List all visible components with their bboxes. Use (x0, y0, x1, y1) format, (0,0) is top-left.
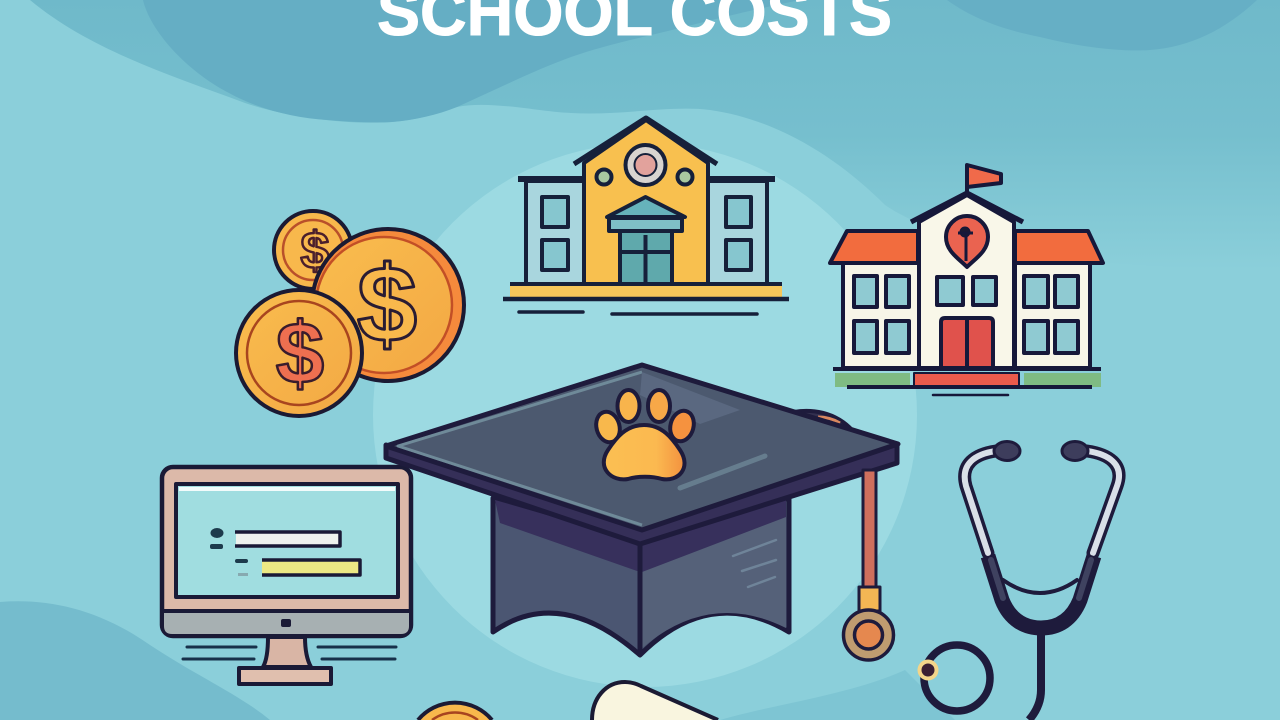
inner arc (1003, 580, 1077, 593)
flag (967, 165, 1001, 192)
icon: yellow school building (503, 118, 789, 314)
screen content rows (210, 528, 360, 576)
small back coin: $ (301, 222, 330, 280)
camera (281, 619, 291, 627)
tassel button (794, 411, 853, 431)
left tube (965, 451, 996, 553)
screen (176, 484, 398, 597)
badge (946, 216, 988, 267)
left earpiece (994, 442, 1020, 460)
yoke (988, 556, 1094, 628)
tubing ring (924, 645, 990, 711)
right roof (1015, 231, 1103, 263)
wing cornices (518, 176, 775, 182)
icon: graduation cap with paw (386, 365, 898, 660)
screen highlight (179, 487, 395, 491)
icon: computer monitor (162, 467, 411, 684)
cap body (493, 498, 789, 655)
small back coin (274, 211, 352, 289)
door (941, 318, 993, 368)
yoke highlight (991, 560, 1091, 598)
tube stem (1029, 635, 1041, 720)
icon: coins (236, 211, 464, 416)
icon: red roof school building (830, 165, 1103, 395)
icon: bottom coin (418, 703, 492, 720)
icon: stethoscope (920, 442, 1119, 720)
monitor body (162, 467, 411, 636)
front coin (236, 290, 362, 416)
brim edge (386, 444, 897, 544)
right earpiece (1062, 442, 1088, 460)
round window (626, 145, 666, 185)
board lighter patch (640, 372, 740, 424)
chest piece (920, 662, 936, 678)
side lines (183, 647, 396, 659)
tassel (844, 470, 894, 660)
foot (239, 668, 331, 684)
chin divider (164, 609, 409, 613)
gable (911, 193, 1023, 222)
right tube (1087, 451, 1119, 553)
chin (164, 611, 409, 634)
board top (386, 365, 898, 530)
windows (854, 276, 1078, 353)
large coin: $ (357, 243, 417, 364)
large coin (312, 229, 464, 381)
portico (607, 197, 685, 231)
board streak (680, 456, 765, 488)
door (620, 230, 672, 284)
dark band (495, 500, 786, 572)
stand (263, 637, 311, 667)
icon: diploma scroll (592, 682, 718, 720)
left wing (526, 181, 584, 285)
board sheen (398, 372, 642, 525)
base (503, 284, 789, 314)
small round windows (596, 170, 692, 184)
base (833, 369, 1101, 395)
left roof (830, 231, 918, 263)
right wing (708, 181, 767, 285)
panel highlights (733, 540, 776, 587)
right panel shade (642, 517, 786, 648)
central block (584, 120, 708, 285)
front coin: $ (276, 305, 324, 402)
centre seam (638, 540, 642, 655)
central tower (919, 195, 1014, 368)
gable roof (574, 118, 717, 164)
paw (593, 390, 697, 479)
right wing (1015, 263, 1090, 368)
left wing (843, 263, 919, 368)
windows (542, 197, 751, 270)
